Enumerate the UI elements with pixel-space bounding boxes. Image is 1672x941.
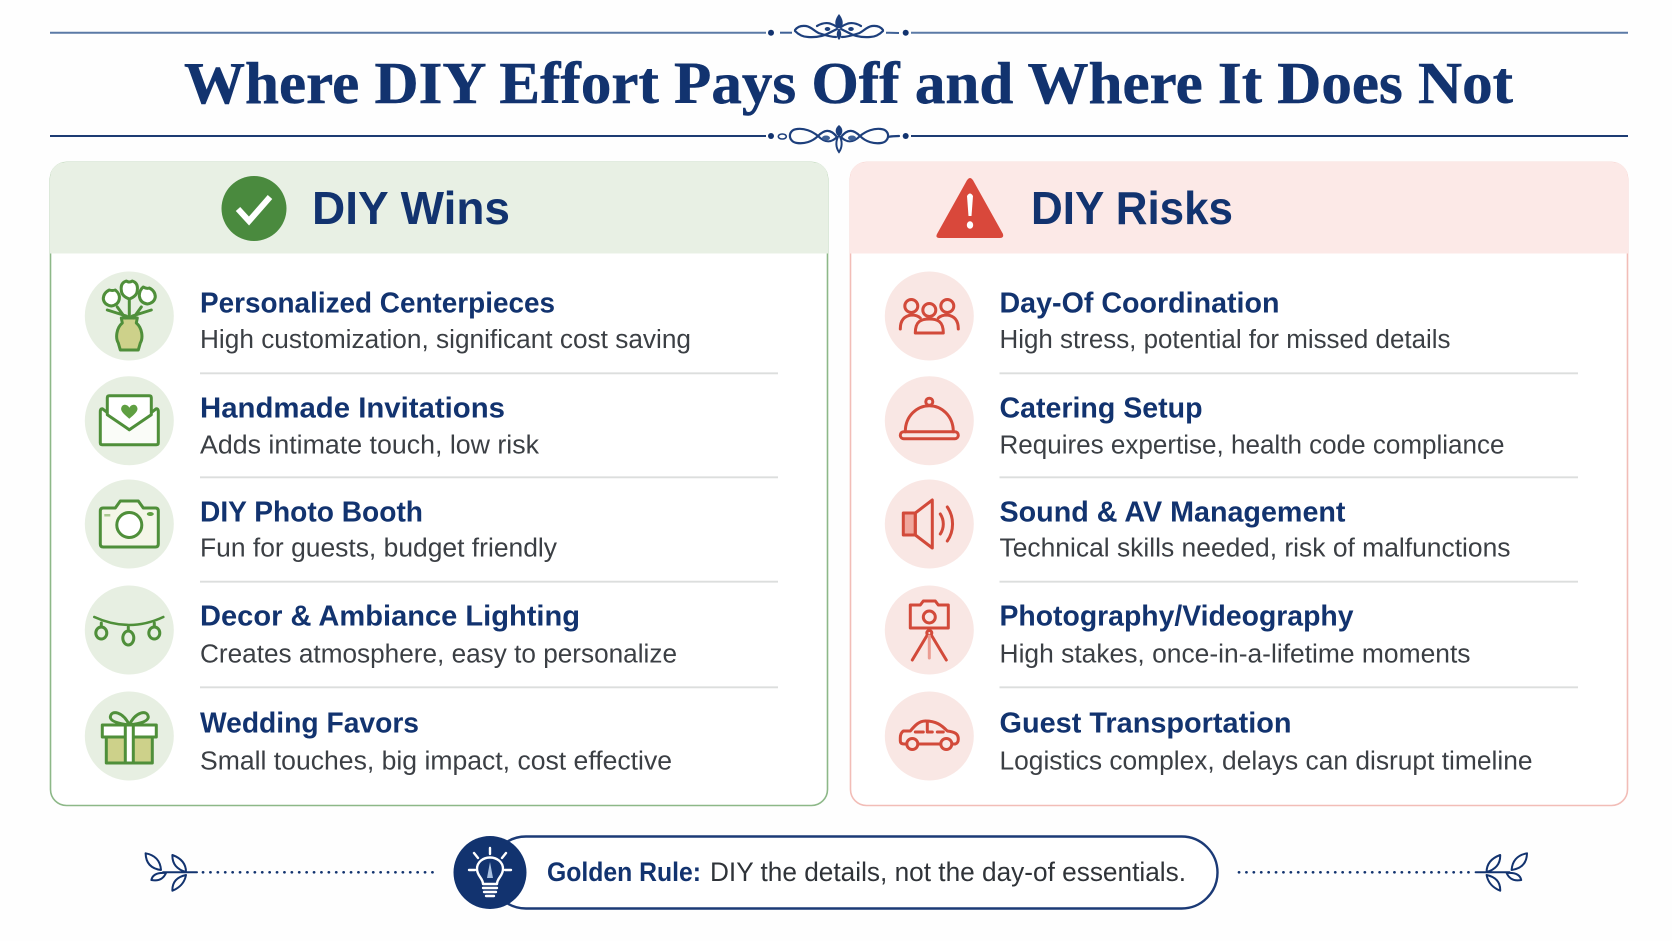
panel: DIY Wins — [50, 162, 828, 806]
item description: High customization, significant cost saving — [200, 326, 691, 354]
item: Day-Of Coordination — [885, 272, 1450, 360]
item description: Creates atmosphere, easy to personalize — [200, 640, 677, 668]
item description: Requires expertise, health code compliance — [1000, 431, 1504, 459]
item description: High stakes, once-in-a-lifetime moments — [1000, 640, 1470, 668]
item: Guest Transportation — [885, 692, 1532, 780]
item: Photography/Videography — [885, 586, 1470, 674]
row dividers: wins — [200, 373, 778, 687]
item title: Wedding Favors — [200, 708, 419, 740]
item: Sound & AV Management — [885, 480, 1510, 568]
item title: Decor & Ambiance Lighting — [200, 601, 580, 633]
icon: warning triangle — [936, 178, 1003, 238]
icon: camera — [100, 501, 158, 547]
item: DIY Photo Booth — [85, 480, 557, 568]
item title: DIY Photo Booth — [200, 497, 423, 529]
icon: envelope with heart — [100, 396, 158, 445]
left sprig and dotted line — [146, 853, 436, 891]
heading: DIY Risks: DIY Risks — [1031, 182, 1233, 234]
top ornamental divider — [50, 14, 1628, 40]
title: Where DIY Effort Pays Off and Where It Does Not — [184, 50, 1513, 116]
item description: Technical skills needed, risk of malfunctions — [1000, 535, 1510, 563]
icon: camera on tripod — [910, 601, 948, 660]
item description: Logistics complex, delays can disrupt timeline — [1000, 747, 1532, 775]
item: Catering Setup — [885, 376, 1504, 465]
item: Handmade Invitations — [85, 376, 539, 465]
item title: Guest Transportation — [1000, 708, 1292, 740]
item description: High stress, potential for missed details — [1000, 326, 1450, 354]
icon: flower vase — [103, 281, 155, 350]
icon: string lights — [94, 617, 163, 645]
item: Wedding Favors — [85, 692, 672, 780]
panel header: DIY Wins — [50, 162, 828, 254]
item title: Day-Of Coordination — [1000, 288, 1280, 320]
item title: Handmade Invitations — [200, 393, 505, 425]
item: Decor & Ambiance Lighting — [85, 586, 677, 674]
item description: Small touches, big impact, cost effective — [200, 747, 672, 775]
golden rule callout — [454, 836, 1218, 909]
icon: green check — [222, 176, 286, 241]
right sprig and dotted line — [1239, 853, 1527, 891]
item title: Catering Setup — [1000, 393, 1202, 425]
item title: Personalized Centerpieces — [200, 288, 555, 320]
icon: gift box — [102, 713, 156, 763]
item title: Photography/Videography — [1000, 601, 1354, 633]
item: Personalized Centerpieces — [85, 272, 691, 360]
golden rule text: DIY the details, not the day-of essentials. — [710, 857, 1186, 887]
item description: Fun for guests, budget friendly — [200, 535, 557, 563]
row dividers: risks — [1000, 373, 1578, 687]
item description: Adds intimate touch, low risk — [200, 431, 539, 459]
heading: DIY Wins: DIY Wins — [312, 182, 510, 234]
icon: group of people — [900, 300, 958, 333]
panel: DIY Risks — [850, 162, 1628, 806]
icon: car — [900, 721, 958, 750]
icon: speaker — [903, 500, 953, 548]
icon: serving cloche — [900, 398, 958, 439]
panel header: DIY Risks — [850, 162, 1628, 254]
icon: light bulb — [454, 836, 526, 909]
golden rule text: Golden Rule: — [547, 857, 701, 887]
bottom ornamental divider — [50, 125, 1628, 152]
item title: Sound & AV Management — [1000, 497, 1346, 529]
